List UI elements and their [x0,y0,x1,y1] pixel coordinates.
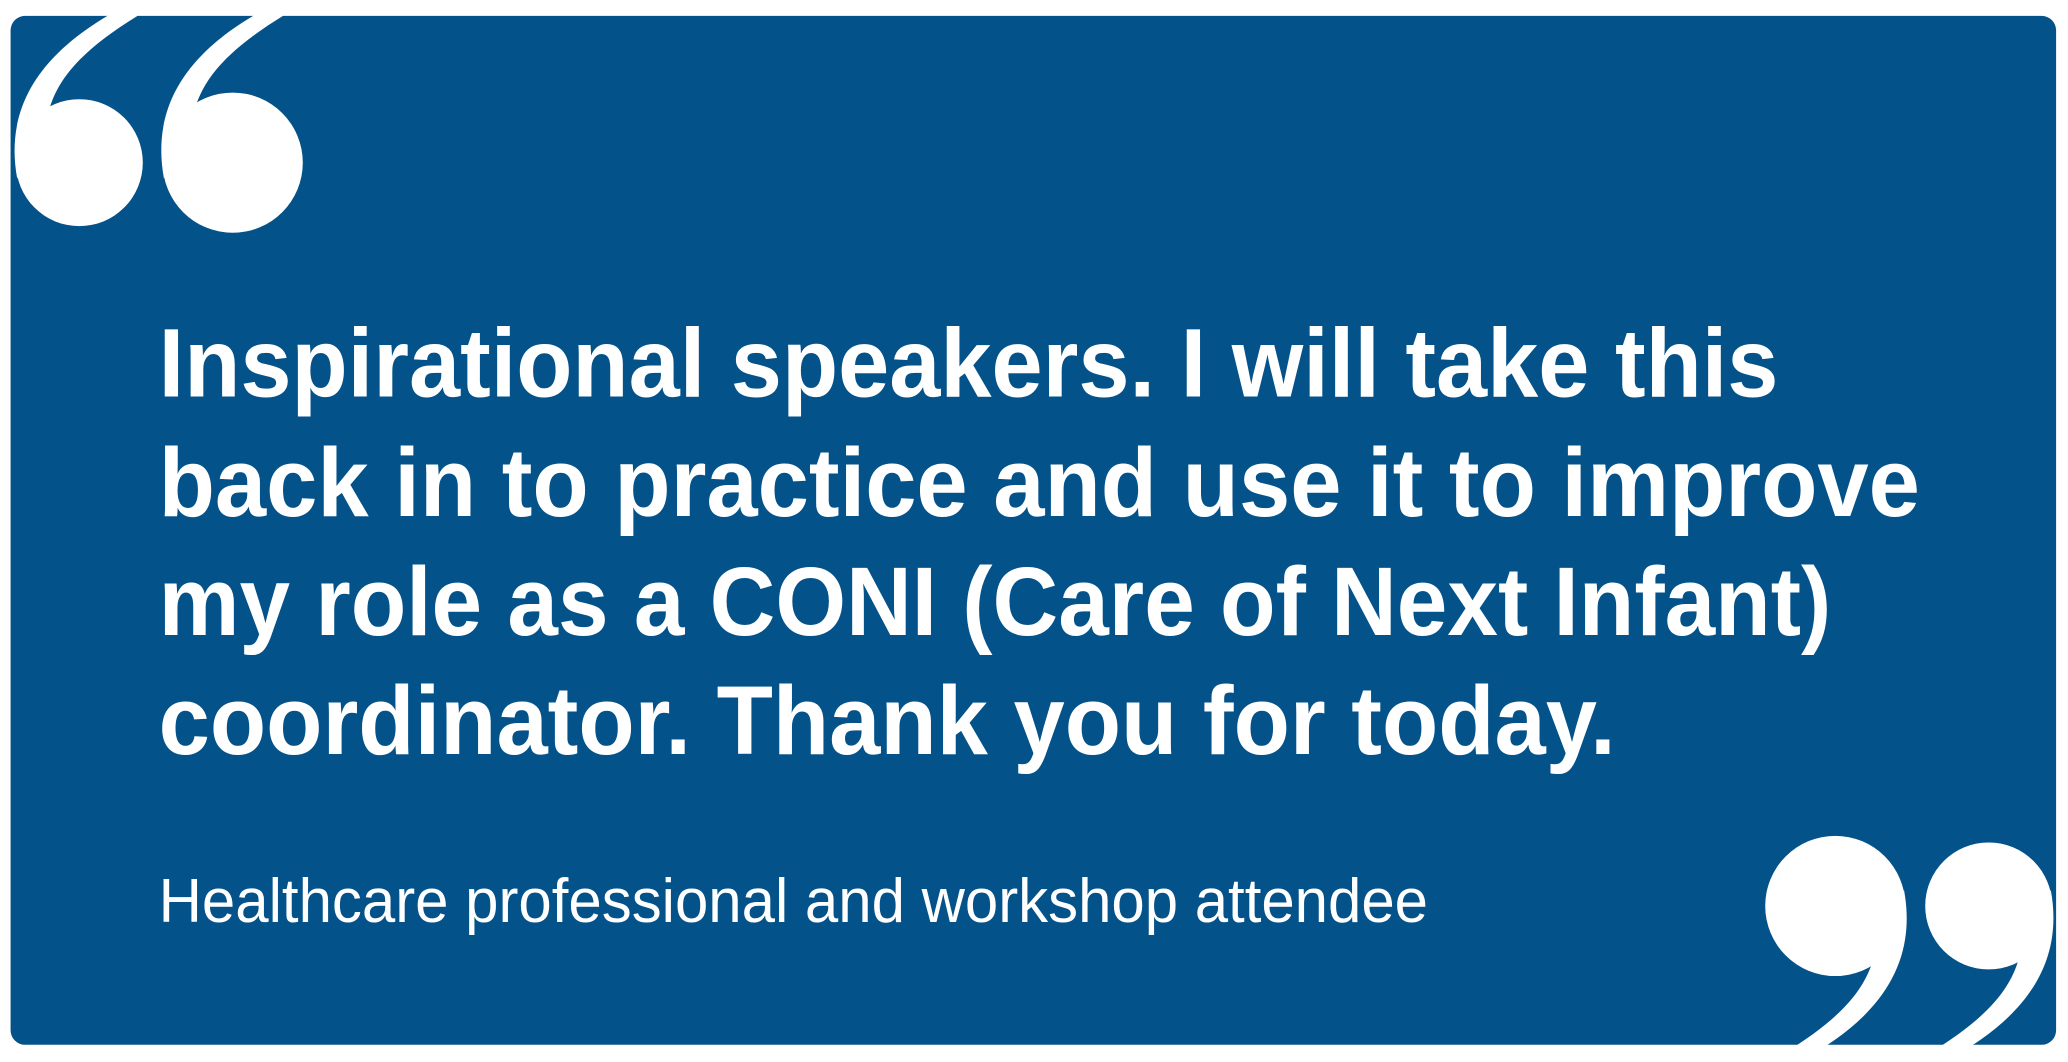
text block: quote: my role as a CONI (Care of Next Infant) [159,546,1831,656]
icon: closing quotation marks [1765,836,2053,1061]
text block: quote: Inspirational speakers. I will take this [159,308,1778,418]
text block: quote [159,308,1920,775]
text block: quote: coordinator. Thank you for today. [159,665,1616,775]
icon: opening quotation marks [15,8,303,233]
text block: attribution: Healthcare professional and workshop attendee [159,867,1428,936]
text block: quote: back in to practice and use it to improve [159,427,1920,537]
